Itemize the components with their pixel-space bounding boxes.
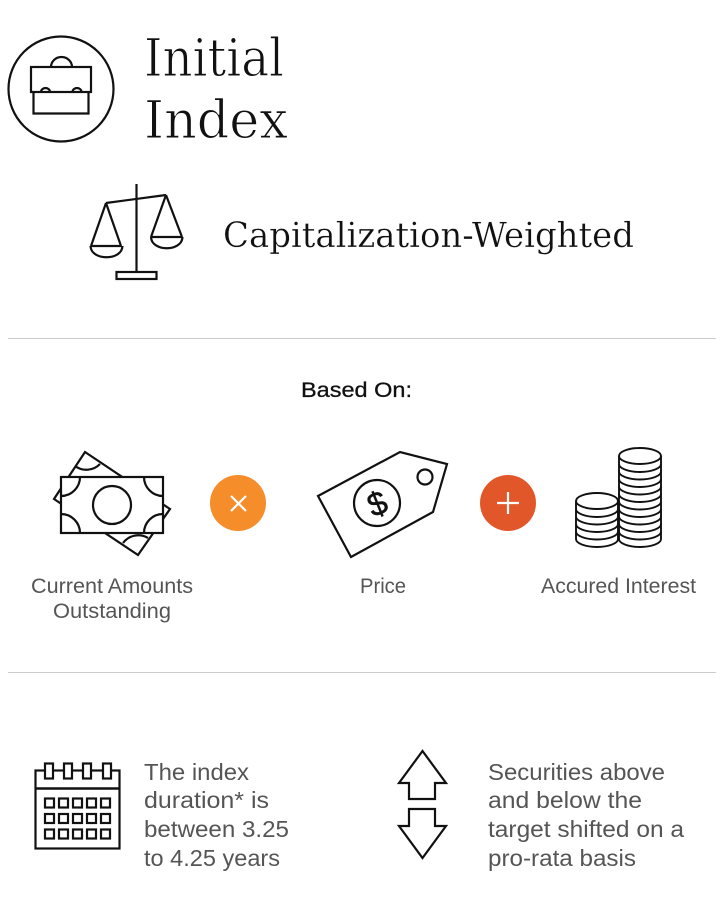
icon: up and down arrows xyxy=(399,751,446,858)
title xyxy=(144,29,288,151)
icon: banknotes xyxy=(54,452,170,555)
icon: briefcase in circle xyxy=(8,36,114,142)
plus symbol xyxy=(480,475,536,531)
text: securities shifted: pro-rata basis xyxy=(488,845,636,871)
multiply symbol xyxy=(210,475,266,531)
text: securities shifted: and below the xyxy=(488,787,642,813)
text: index duration xyxy=(144,759,289,871)
text: index duration: between 3.25 xyxy=(144,816,289,842)
title: Initial xyxy=(144,29,284,89)
icon: calendar xyxy=(36,764,120,848)
heading: based on: Based On: xyxy=(301,379,412,402)
icon: coin stacks xyxy=(576,448,661,547)
text: index duration: to 4.25 years xyxy=(144,845,280,871)
label: current amounts outstanding: Outstanding xyxy=(53,599,171,623)
label: price: Price xyxy=(360,574,406,598)
text: securities shifted: target shifted on a xyxy=(488,816,685,842)
icon: price tag xyxy=(318,452,447,557)
label: current amounts outstanding xyxy=(31,574,193,623)
title: Index xyxy=(144,91,288,151)
text: index duration: duration* is xyxy=(144,787,269,813)
text: securities shifted: Securities above xyxy=(488,759,665,785)
heading: capitalization-weighted: Capitalization-Weighted xyxy=(223,216,634,256)
label: current amounts outstanding: Current Amounts xyxy=(31,574,193,598)
label: accured interest: Accured Interest xyxy=(541,574,696,598)
text: index duration: The index xyxy=(144,759,249,785)
text: securities shifted xyxy=(488,759,685,871)
icon: balance scale xyxy=(90,184,182,279)
icon: price tag: $ xyxy=(362,483,393,524)
